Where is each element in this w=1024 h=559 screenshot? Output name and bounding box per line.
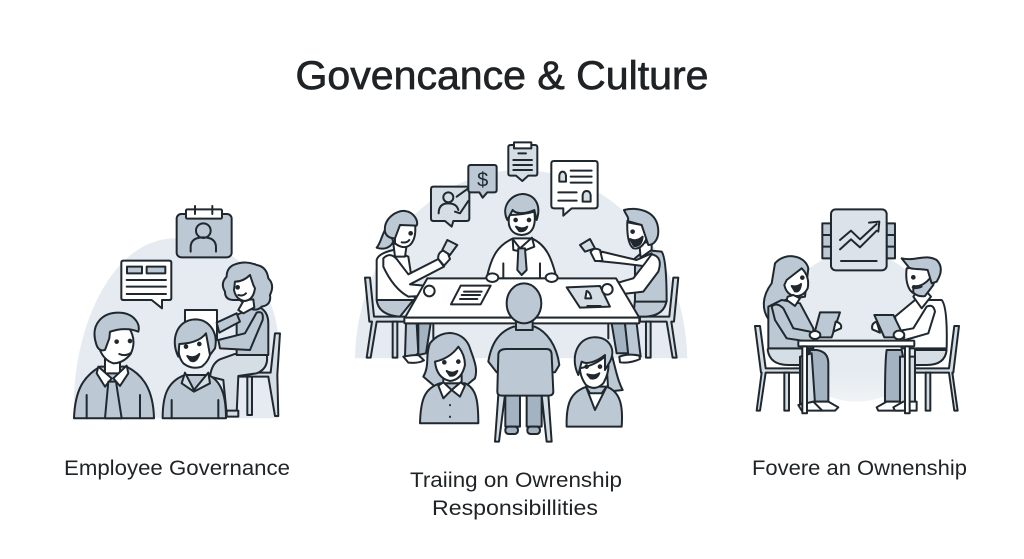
man with beard and tablet (872, 257, 947, 411)
table (798, 341, 914, 413)
icon: person and check bubble (431, 187, 469, 227)
smiling man in sweater (163, 319, 226, 418)
tablet on table (567, 286, 610, 308)
icon: calendar with person (177, 206, 232, 257)
panel: ownership illustration (755, 209, 959, 413)
woman with tablet (764, 256, 841, 411)
title: Govencance & Culture (296, 54, 708, 98)
label: training on ownership responsibilities (410, 468, 622, 520)
woman bottom right (567, 337, 623, 427)
person at head of table (487, 194, 557, 278)
label: training on ownership responsibilities: Responsibillities (432, 496, 598, 520)
person seen from behind in chair (488, 283, 559, 442)
hands on table (486, 273, 498, 282)
icon: speech bubble with profiles (551, 161, 598, 216)
man with tie (74, 313, 154, 418)
table legs (433, 323, 608, 338)
background circle (74, 238, 278, 418)
person right with card (580, 209, 667, 363)
icon: dollar bubble (468, 165, 497, 198)
chairs (755, 326, 959, 411)
panel: employee governance illustration (74, 206, 280, 418)
label: employee governance: Employee Governance (64, 456, 290, 480)
panel: training illustration (355, 142, 687, 442)
label: training on ownership responsibilities: Traiing on Owrenship (410, 468, 622, 492)
background semicircle (355, 170, 687, 358)
icon: speech bubble with text (121, 261, 171, 308)
label: fostering an ownership: Fovere an Ownenship (752, 456, 967, 480)
chair (237, 333, 280, 416)
icon: dollar bubble: $ (477, 170, 488, 192)
conference table (404, 273, 639, 323)
person left with card (377, 211, 457, 363)
chairs (365, 278, 678, 358)
woman bottom left (420, 333, 478, 423)
background circle (782, 252, 932, 402)
woman with curly hair at laptop (185, 262, 280, 417)
icon: growth chart board (822, 209, 895, 270)
icon: clipboard (508, 142, 537, 181)
document on table (451, 286, 491, 304)
